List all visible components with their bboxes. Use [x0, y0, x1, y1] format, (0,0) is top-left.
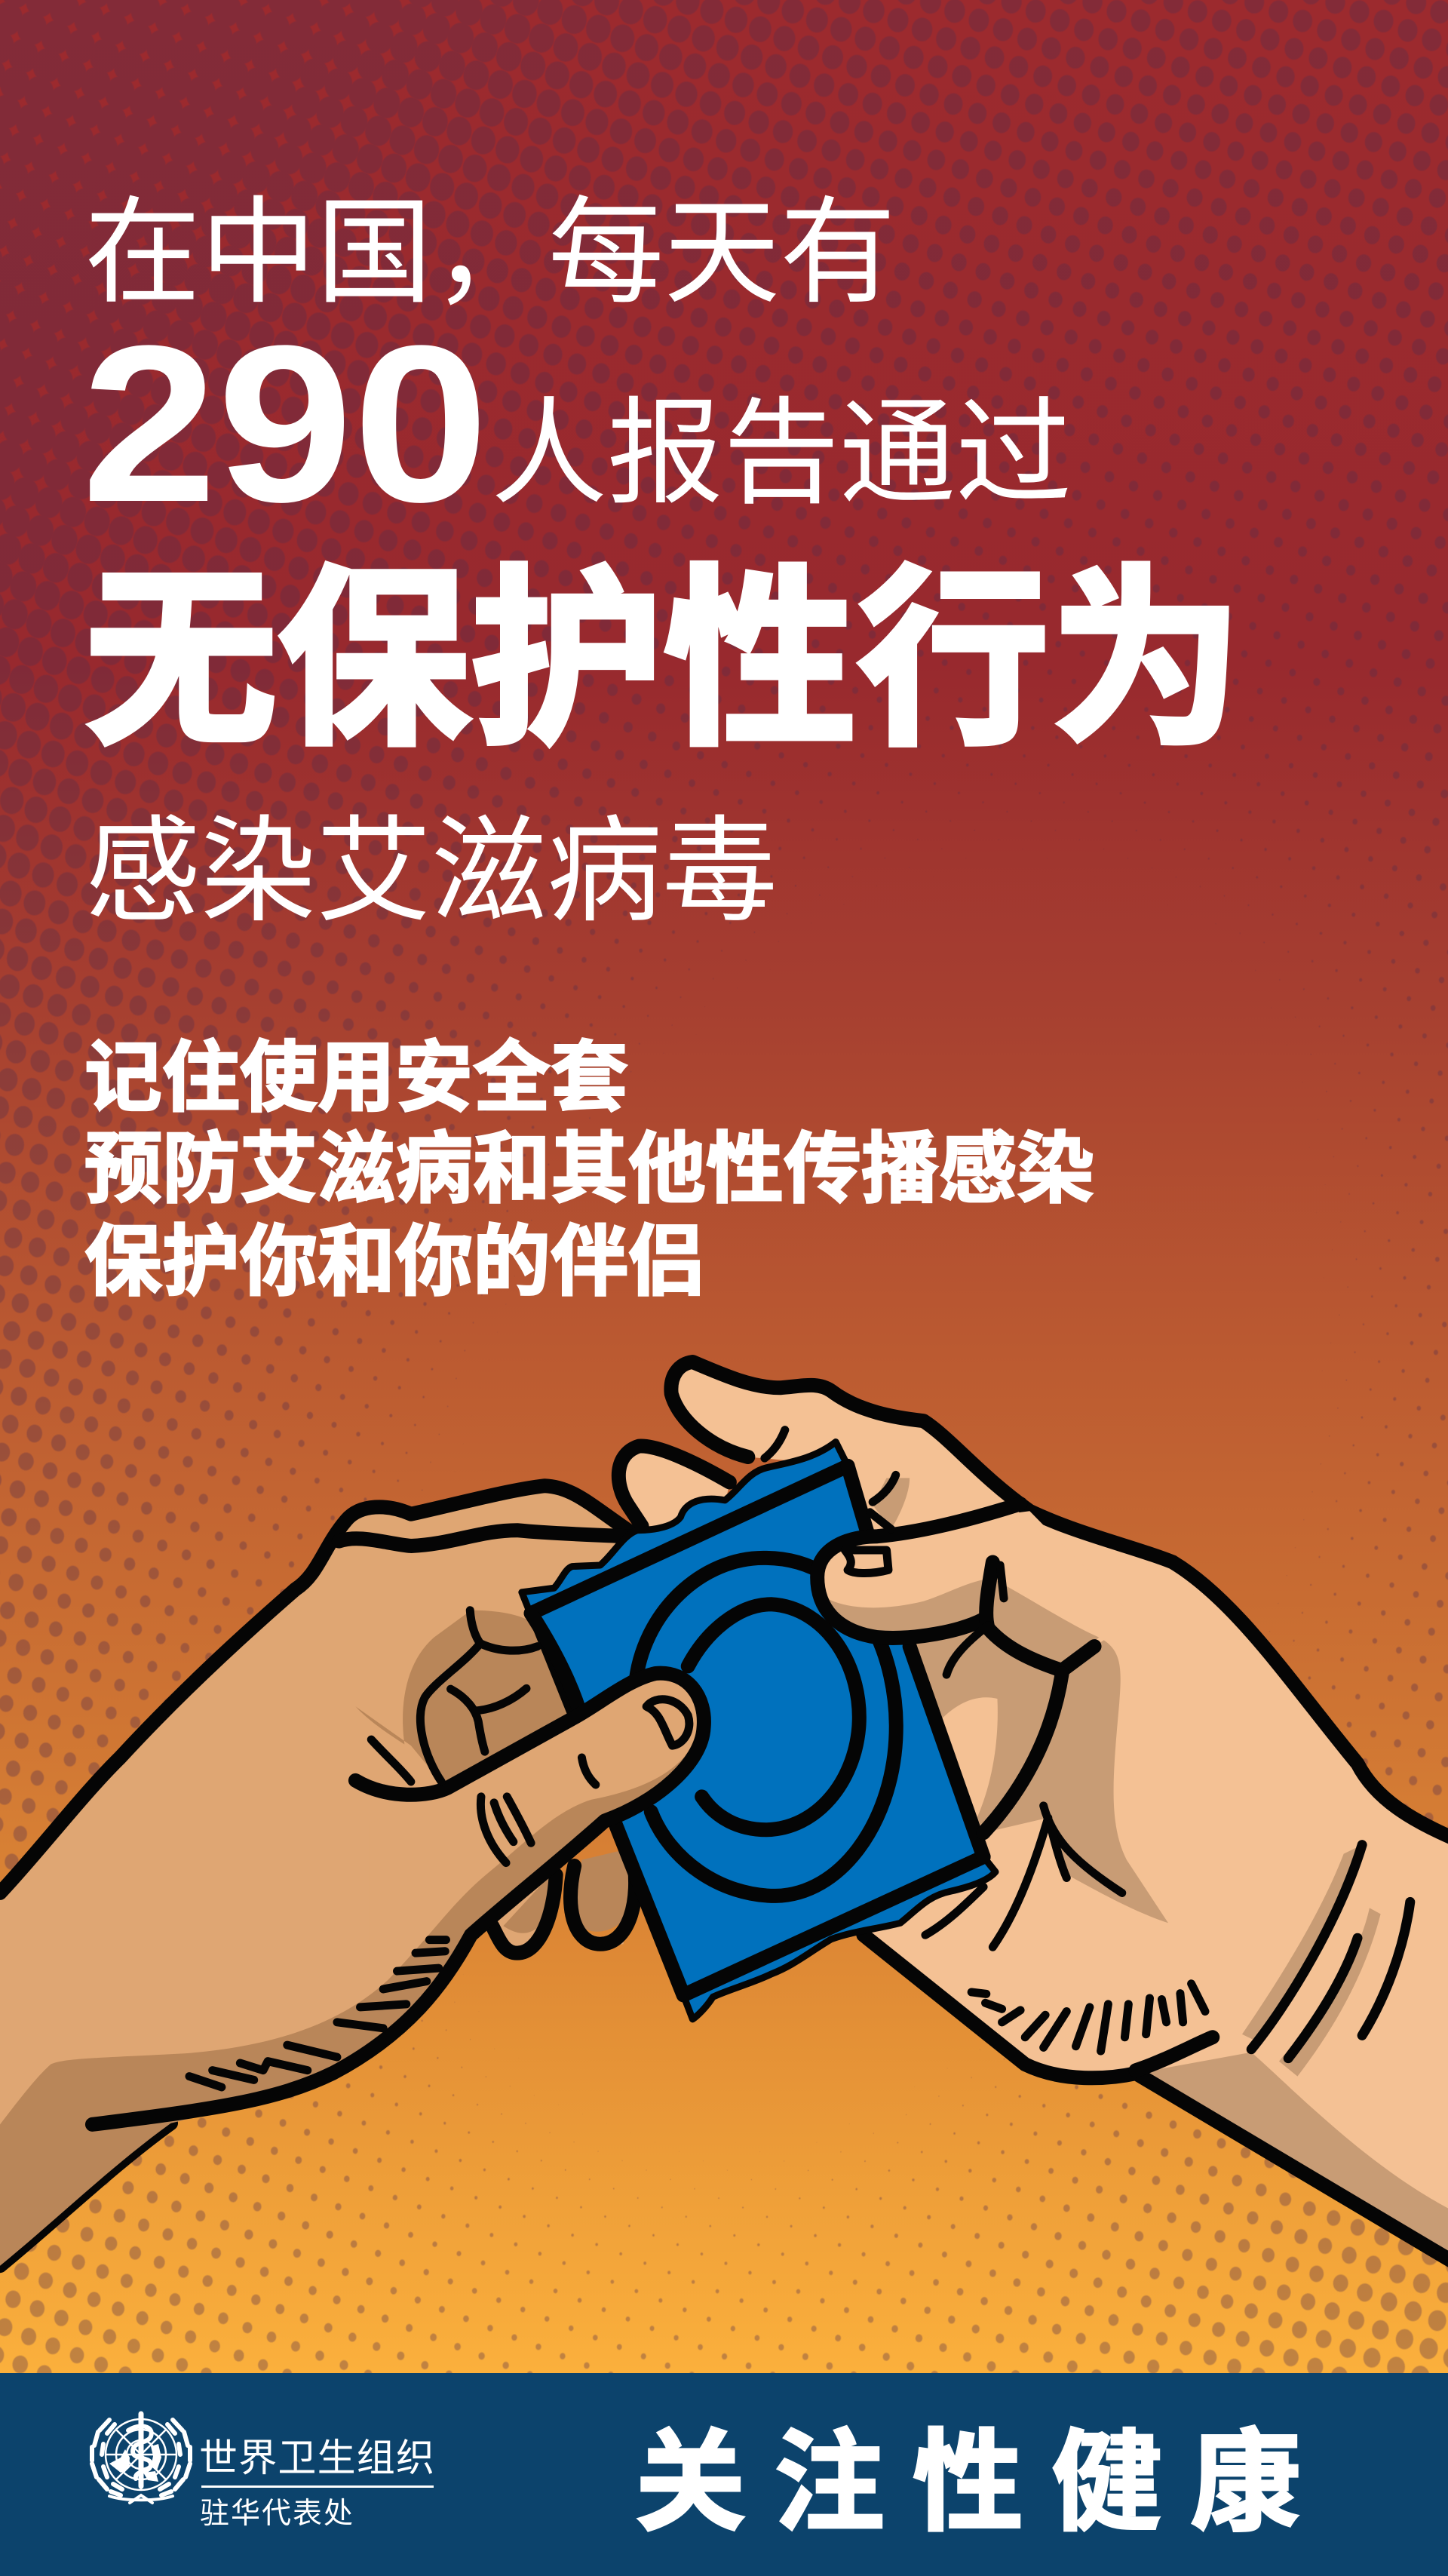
serrated wrapper edges	[522, 1442, 996, 2019]
message line 3: 保护你和你的伴侣	[84, 1218, 706, 1305]
campaign slogan: 关注性健康	[635, 2421, 1329, 2545]
condom ring inner	[688, 1604, 859, 1830]
heading line: in China, every day: 在中国，每天有	[84, 188, 896, 318]
palm shadow between thumb and fingers	[355, 1610, 581, 1785]
right hand outline	[671, 1362, 1448, 1839]
message line 1: 记住使用安全套	[84, 1034, 628, 1121]
condom packet	[522, 1442, 996, 2019]
palm shadow	[910, 1595, 1168, 1923]
continents	[109, 2444, 161, 2482]
WHO logo	[92, 2414, 190, 2503]
fingernail	[845, 1550, 888, 1574]
left thumb over packet	[0, 1610, 704, 2266]
right wrist wrinkles and arm lines	[971, 1845, 1410, 2059]
big number 290: 290	[81, 299, 489, 548]
WHO name: 世界卫生组织	[199, 2436, 434, 2479]
heading line: HIV infection: 感染艾滋病毒	[85, 807, 778, 936]
left hand outline	[0, 1486, 628, 1893]
staff	[139, 2414, 143, 2486]
ribbon	[109, 2495, 173, 2503]
right finger over packet	[765, 1430, 1136, 1947]
lower finger tip above packet	[618, 1448, 729, 1529]
laurel wreath	[92, 2420, 190, 2495]
thumb and palm creases	[581, 1758, 596, 1785]
knuckle lines	[986, 1562, 1094, 1670]
right hand	[618, 1362, 1448, 2263]
logo divider	[201, 2485, 434, 2488]
condom ring outer	[635, 1558, 896, 1896]
WHO China office: 驻华代表处	[200, 2498, 353, 2530]
heading line: people reported via: 人报告通过	[491, 388, 1072, 518]
packet face	[531, 1466, 983, 1995]
message text block	[84, 1034, 1094, 1305]
message line 2: 预防艾滋病和其他性传播感染	[84, 1125, 1094, 1212]
serpent	[128, 2426, 152, 2479]
thumbnail	[646, 1699, 689, 1745]
footer band	[0, 2373, 1448, 2576]
thumb outline	[92, 1673, 704, 2124]
globe	[106, 2419, 176, 2490]
left wrist wrinkles	[189, 1940, 446, 2087]
illustration: two hands holding a condom packet	[0, 1362, 1448, 2266]
heading emphasis: unprotected sex: 无保护性行为	[84, 553, 1243, 769]
back fingers of left hand	[489, 1848, 642, 1953]
right arm shadow	[1136, 2053, 1448, 2263]
left hand palm	[0, 1486, 646, 2266]
